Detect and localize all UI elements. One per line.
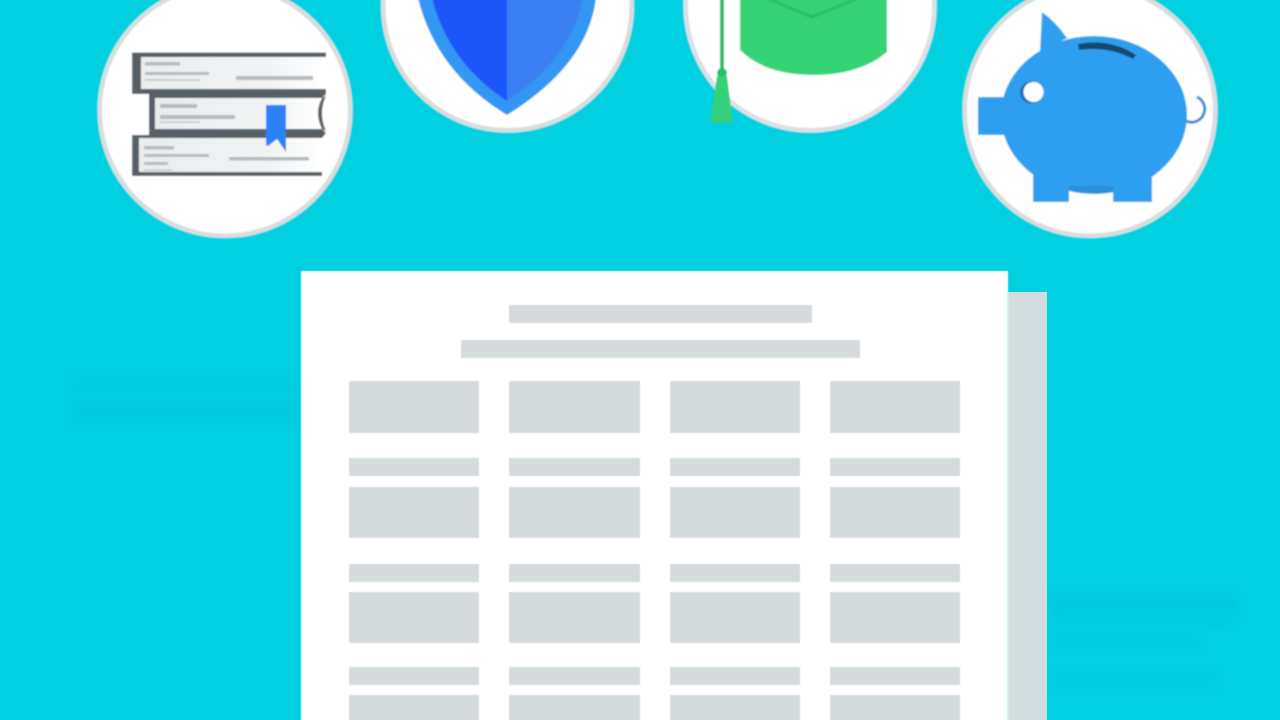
heading placeholder bars	[461, 305, 860, 358]
table header row	[349, 381, 960, 433]
icon: piggy bank	[964, 0, 1216, 236]
icon: shield	[383, 0, 632, 130]
icon: graduation cap	[686, 0, 934, 130]
icon: stack of books	[100, 0, 350, 236]
panel: document back sheet	[1008, 292, 1047, 720]
table row 2	[349, 564, 960, 643]
table row 3	[349, 667, 960, 720]
icon: bookmark	[266, 105, 286, 152]
panel: document	[301, 271, 1008, 720]
table row 1	[349, 458, 960, 538]
icon: tassel	[710, 0, 733, 123]
